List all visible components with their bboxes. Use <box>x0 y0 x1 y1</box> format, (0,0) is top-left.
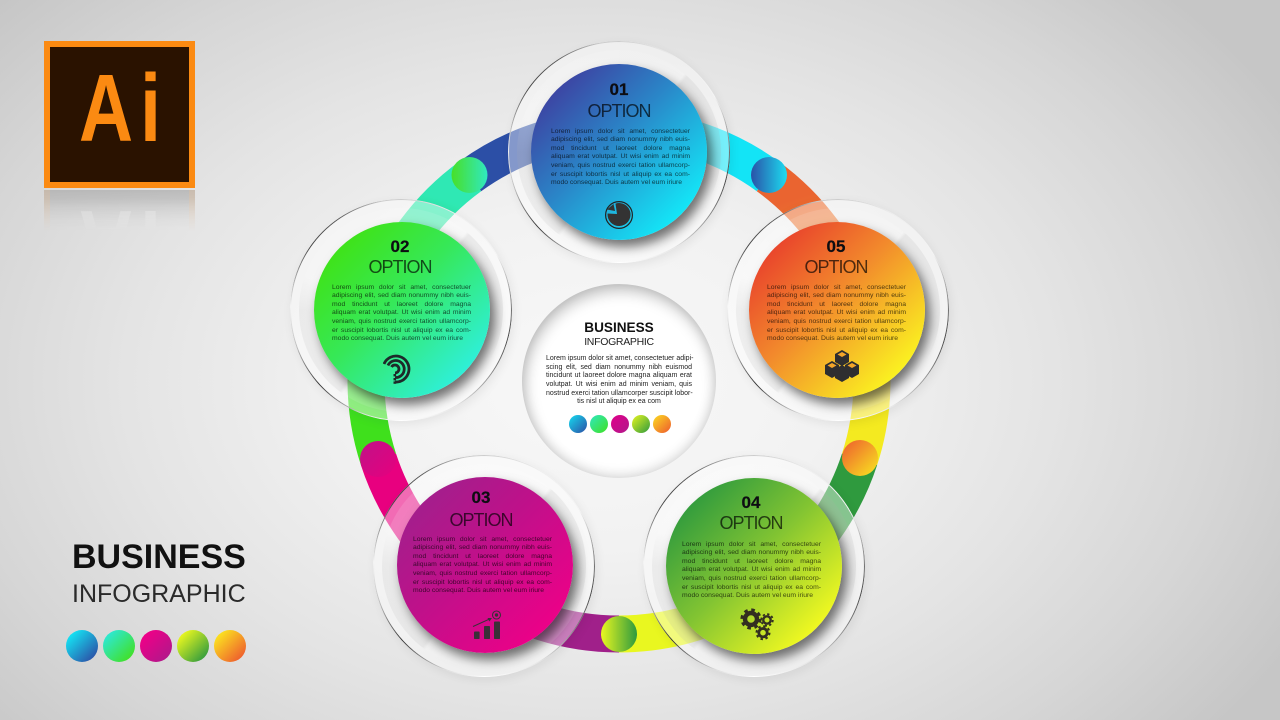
text 02: Lorem ipsum dolor sit amet, consectetuer <box>332 284 471 290</box>
number 05: 05 <box>827 237 845 256</box>
glass lens 03 <box>373 455 595 677</box>
label option 04: OPTION <box>719 513 782 533</box>
center circle: business infographic <box>522 284 716 478</box>
glass lens 02 <box>290 199 512 421</box>
center body text: tis nisl ut aliquip ex ea com <box>577 398 661 405</box>
label option 02: OPTION <box>368 257 432 277</box>
text 03: Lorem ipsum dolor sit amet, consectetuer <box>413 536 552 542</box>
text 01 <box>551 128 690 186</box>
logo reflection <box>44 190 195 223</box>
text 04 <box>682 540 821 599</box>
text 04: er suscipit lobortis nisl ut aliquip ex ea com- <box>682 584 821 591</box>
text 02 <box>332 284 471 342</box>
label option 03: OPTION <box>449 510 512 530</box>
icon: pie chart <box>605 201 633 229</box>
text 02: modo consequat. Duis autem vel eum iriure <box>332 335 463 342</box>
text 01: mod tincidunt ut laoreet dolore magna <box>551 145 690 152</box>
number 02: 02 <box>391 237 409 256</box>
icon: signal arcs <box>383 354 410 384</box>
center subheading: INFOGRAPHIC <box>584 336 654 348</box>
number 04: 04 <box>742 493 760 512</box>
text 05: mod tincidunt ut laoreet dolore magna <box>767 301 906 308</box>
center body text: volutpat. Ut wisi enim ad minim veniam, quis <box>546 381 692 388</box>
text 01: er suscipit lobortis nisl ut aliquip ex ea com- <box>551 171 690 178</box>
text 04: modo consequat. Duis autem vel eum iriure <box>682 592 813 599</box>
number 01: 01 <box>610 80 628 99</box>
center body text: Lorem ipsum dolor sit amet, consectetuer adipi- <box>546 355 693 362</box>
disk 04 <box>666 478 842 654</box>
panel: option 03 <box>374 455 597 680</box>
center heading: BUSINESS <box>584 320 654 335</box>
center body text: nostrud exerci tation ullamcorper suscipit lobor- <box>546 390 693 397</box>
text 05 <box>767 284 906 342</box>
disk 03 <box>397 477 573 653</box>
text 01: modo consequat. Duis autem vel eum iriure <box>551 179 682 186</box>
glass lens 05 <box>727 199 949 421</box>
text 05: veniam, quis nostrud exerci tation ullamcorp- <box>767 318 906 325</box>
label option 05: OPTION <box>804 257 868 277</box>
text 04: mod tincidunt ut laoreet dolore magna <box>682 558 821 565</box>
label option 01: OPTION <box>587 100 650 120</box>
text 03: veniam, quis nostrud exerci tation ullamcorp- <box>413 570 552 577</box>
legend color dots <box>66 630 246 662</box>
disk 05 <box>749 222 925 398</box>
icon: growth bars <box>472 610 501 639</box>
center body text: tincidunt ut laoreet dolore magna aliquam erat <box>546 372 692 379</box>
panel: option 04 <box>644 455 867 680</box>
panel: option 01 <box>508 41 732 266</box>
title: business infographic <box>72 538 246 608</box>
text 03: mod tincidunt ut laoreet dolore magna <box>413 553 552 560</box>
panel: option 02 <box>290 199 514 424</box>
text 02: mod tincidunt ut laoreet dolore magna <box>332 301 471 308</box>
text 04: veniam, quis nostrud exerci tation ullamcorp- <box>682 575 821 582</box>
text 05: modo consequat. Duis autem vel eum iriure <box>767 335 898 342</box>
text 04: Lorem ipsum dolor sit amet, consectetuer <box>682 540 821 548</box>
text 03: aliquam erat volutpat. Ut wisi enim ad minim <box>413 561 552 568</box>
icon: gears <box>740 608 774 640</box>
text 02: er suscipit lobortis nisl ut aliquip ex ea com- <box>332 327 471 334</box>
text 03: er suscipit lobortis nisl ut aliquip ex ea com- <box>413 579 552 586</box>
center body text <box>546 354 694 405</box>
text 04: aliquam erat volutpat. Ut wisi enim ad minim <box>682 566 821 573</box>
disk 01 <box>531 64 707 240</box>
text 02: aliquam erat volutpat. Ut wisi enim ad minim <box>332 309 471 316</box>
center body text: scing elit, sed diam nonummy nibh euismod <box>546 364 692 371</box>
text 01: veniam, quis nostrud exerci tation ullamcorp- <box>551 162 690 169</box>
glass lens 01 <box>508 41 730 263</box>
disk 02 <box>314 222 490 398</box>
text 03 <box>413 536 552 594</box>
text 03: modo consequat. Duis autem vel eum iriure <box>413 587 544 594</box>
text 01: adipiscing elit, sed diam nonummy nibh euis- <box>551 136 690 143</box>
glass lens 04 <box>643 455 865 677</box>
logo: Adobe Illustrator <box>44 41 195 188</box>
text 02: veniam, quis nostrud exerci tation ullamcorp- <box>332 318 471 325</box>
center color dots <box>569 415 671 433</box>
text 03: adipiscing elit, sed diam nonummy nibh euis- <box>413 544 552 551</box>
number 03: 03 <box>472 488 490 507</box>
title line two: INFOGRAPHIC <box>72 580 246 608</box>
text 02: adipiscing elit, sed diam nonummy nibh euis- <box>332 292 471 299</box>
text 05: Lorem ipsum dolor sit amet, consectetuer <box>767 284 906 290</box>
logo letters: Ai <box>79 55 168 162</box>
text 01: aliquam erat volutpat. Ut wisi enim ad minim <box>551 153 690 160</box>
icon: cubes <box>825 350 859 382</box>
text 05: adipiscing elit, sed diam nonummy nibh euis- <box>767 292 906 299</box>
text 04: adipiscing elit, sed diam nonummy nibh euis- <box>682 549 821 556</box>
title line one: BUSINESS <box>72 538 246 576</box>
text 05: er suscipit lobortis nisl ut aliquip ex ea com- <box>767 327 906 334</box>
text 05: aliquam erat volutpat. Ut wisi enim ad minim <box>767 309 906 316</box>
panel: option 05 <box>728 199 951 424</box>
text 01: Lorem ipsum dolor sit amet, consectetuer <box>551 128 690 134</box>
